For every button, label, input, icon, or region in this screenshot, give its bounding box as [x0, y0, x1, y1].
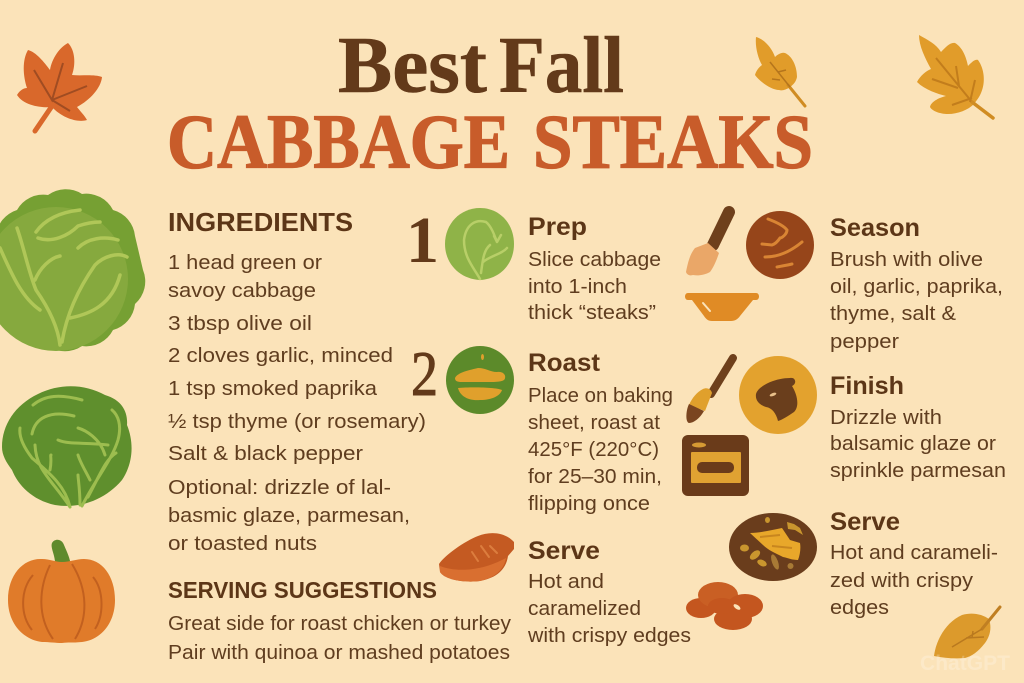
icon: small oak leaf	[755, 37, 805, 106]
text: season: pepper	[830, 330, 899, 353]
ingredient list: 1 head green or	[168, 251, 322, 274]
icon: basting brush	[686, 212, 729, 275]
text: roast: flipping once	[528, 492, 650, 515]
suggestions text: Pair with quinoa or mashed potatoes	[168, 641, 510, 664]
icon: pumpkin	[8, 540, 115, 643]
text: serve: zed with crispy	[830, 569, 974, 592]
title: Fall	[499, 20, 624, 110]
text: roast: sheet, roast at	[528, 411, 660, 434]
ingredient list: ½ tsp thyme (or rosemary)	[168, 410, 426, 433]
panel: serving suggestions	[168, 577, 512, 664]
heading: ingredients: INGREDIENTS	[168, 207, 353, 237]
text: roast: Place on baking	[528, 384, 673, 407]
heading: season: Season	[830, 214, 920, 242]
text: serve: with crispy edges	[527, 624, 691, 647]
text: prep: thick “steaks”	[528, 301, 656, 324]
icon: maple leaf	[17, 43, 102, 131]
text: serve: Hot and carameli-	[830, 541, 998, 564]
title: STEAKS	[533, 99, 813, 185]
watermark: ChatGPT	[920, 652, 1010, 675]
icon: oven	[682, 435, 749, 496]
heading: prep: Prep	[528, 213, 587, 241]
text: finish: Drizzle with	[830, 406, 942, 429]
ingredient list: Optional: drizzle of lal-	[168, 476, 391, 499]
text: season: oil, garlic, paprika,	[830, 275, 1003, 298]
text: season	[830, 248, 1003, 353]
text: finish	[830, 406, 1006, 482]
text: roast: 425°F (220°C)	[528, 438, 659, 461]
text: roast	[528, 384, 673, 515]
heading: finish: Finish	[830, 372, 904, 400]
text: roast: for 25–30 min,	[528, 465, 662, 488]
text: prep: into 1-inch	[528, 275, 627, 298]
title	[167, 20, 813, 185]
ingredient list	[168, 251, 426, 555]
panel: ingredients	[168, 207, 426, 555]
icon: savoy cabbage	[2, 386, 132, 507]
suggestions text	[168, 612, 512, 664]
text: serve	[830, 541, 998, 619]
text: serve: Hot and	[528, 570, 604, 593]
heading: serve: Serve	[830, 508, 900, 536]
ingredient list: 1 tsp smoked paprika	[168, 377, 378, 400]
icon: steak	[439, 533, 514, 582]
heading: serving suggestions: SERVING SUGGESTIONS	[168, 577, 437, 603]
title: Best	[338, 20, 487, 110]
panel: step finish	[830, 372, 1006, 482]
text: season: Brush with olive	[830, 248, 983, 271]
icon: glazed cabbage	[739, 356, 817, 434]
icon: roasted pieces	[686, 582, 763, 630]
icon: glaze brush	[686, 358, 733, 423]
icon: roast plate	[446, 346, 514, 414]
panel: step serve (left)	[527, 537, 691, 647]
title: CABBAGE	[167, 99, 510, 185]
text: prep	[528, 248, 661, 324]
text: season: thyme, salt &	[830, 302, 956, 325]
icon: cabbage slice	[445, 208, 514, 280]
icon: green cabbage	[0, 189, 145, 351]
icon: seasoned cabbage	[746, 211, 814, 279]
ingredient list: Salt & black pepper	[168, 442, 363, 465]
ingredient list: or toasted nuts	[168, 532, 317, 555]
ingredient list: 3 tbsp olive oil	[168, 312, 312, 335]
ingredient list: 2 cloves garlic, minced	[168, 344, 393, 367]
text: serve	[527, 570, 691, 647]
suggestions text: Great side for roast chicken or turkey	[168, 612, 512, 635]
ingredient list: savoy cabbage	[168, 279, 316, 302]
panel: step serve (right)	[830, 508, 998, 619]
ingredient list: basmic glaze, parmesan,	[168, 504, 410, 527]
icon: large oak leaf	[917, 35, 993, 118]
heading: roast: Roast	[528, 349, 601, 377]
text: serve: edges	[830, 596, 889, 619]
panel: step roast	[528, 349, 673, 515]
panel: step prep	[528, 213, 661, 324]
text: finish: sprinkle parmesan	[830, 459, 1006, 482]
icon: corner leaf	[934, 607, 1000, 658]
panel: step season	[830, 214, 1003, 353]
icon: baking bowl	[685, 293, 759, 321]
step number 1: 1	[406, 204, 439, 277]
step number 2: 2	[411, 338, 438, 409]
text: finish: balsamic glaze or	[830, 432, 996, 455]
icon: serving plate	[729, 513, 817, 581]
heading: serve: Serve	[528, 537, 600, 565]
text: prep: Slice cabbage	[528, 248, 661, 271]
text: serve: caramelized	[528, 597, 641, 620]
